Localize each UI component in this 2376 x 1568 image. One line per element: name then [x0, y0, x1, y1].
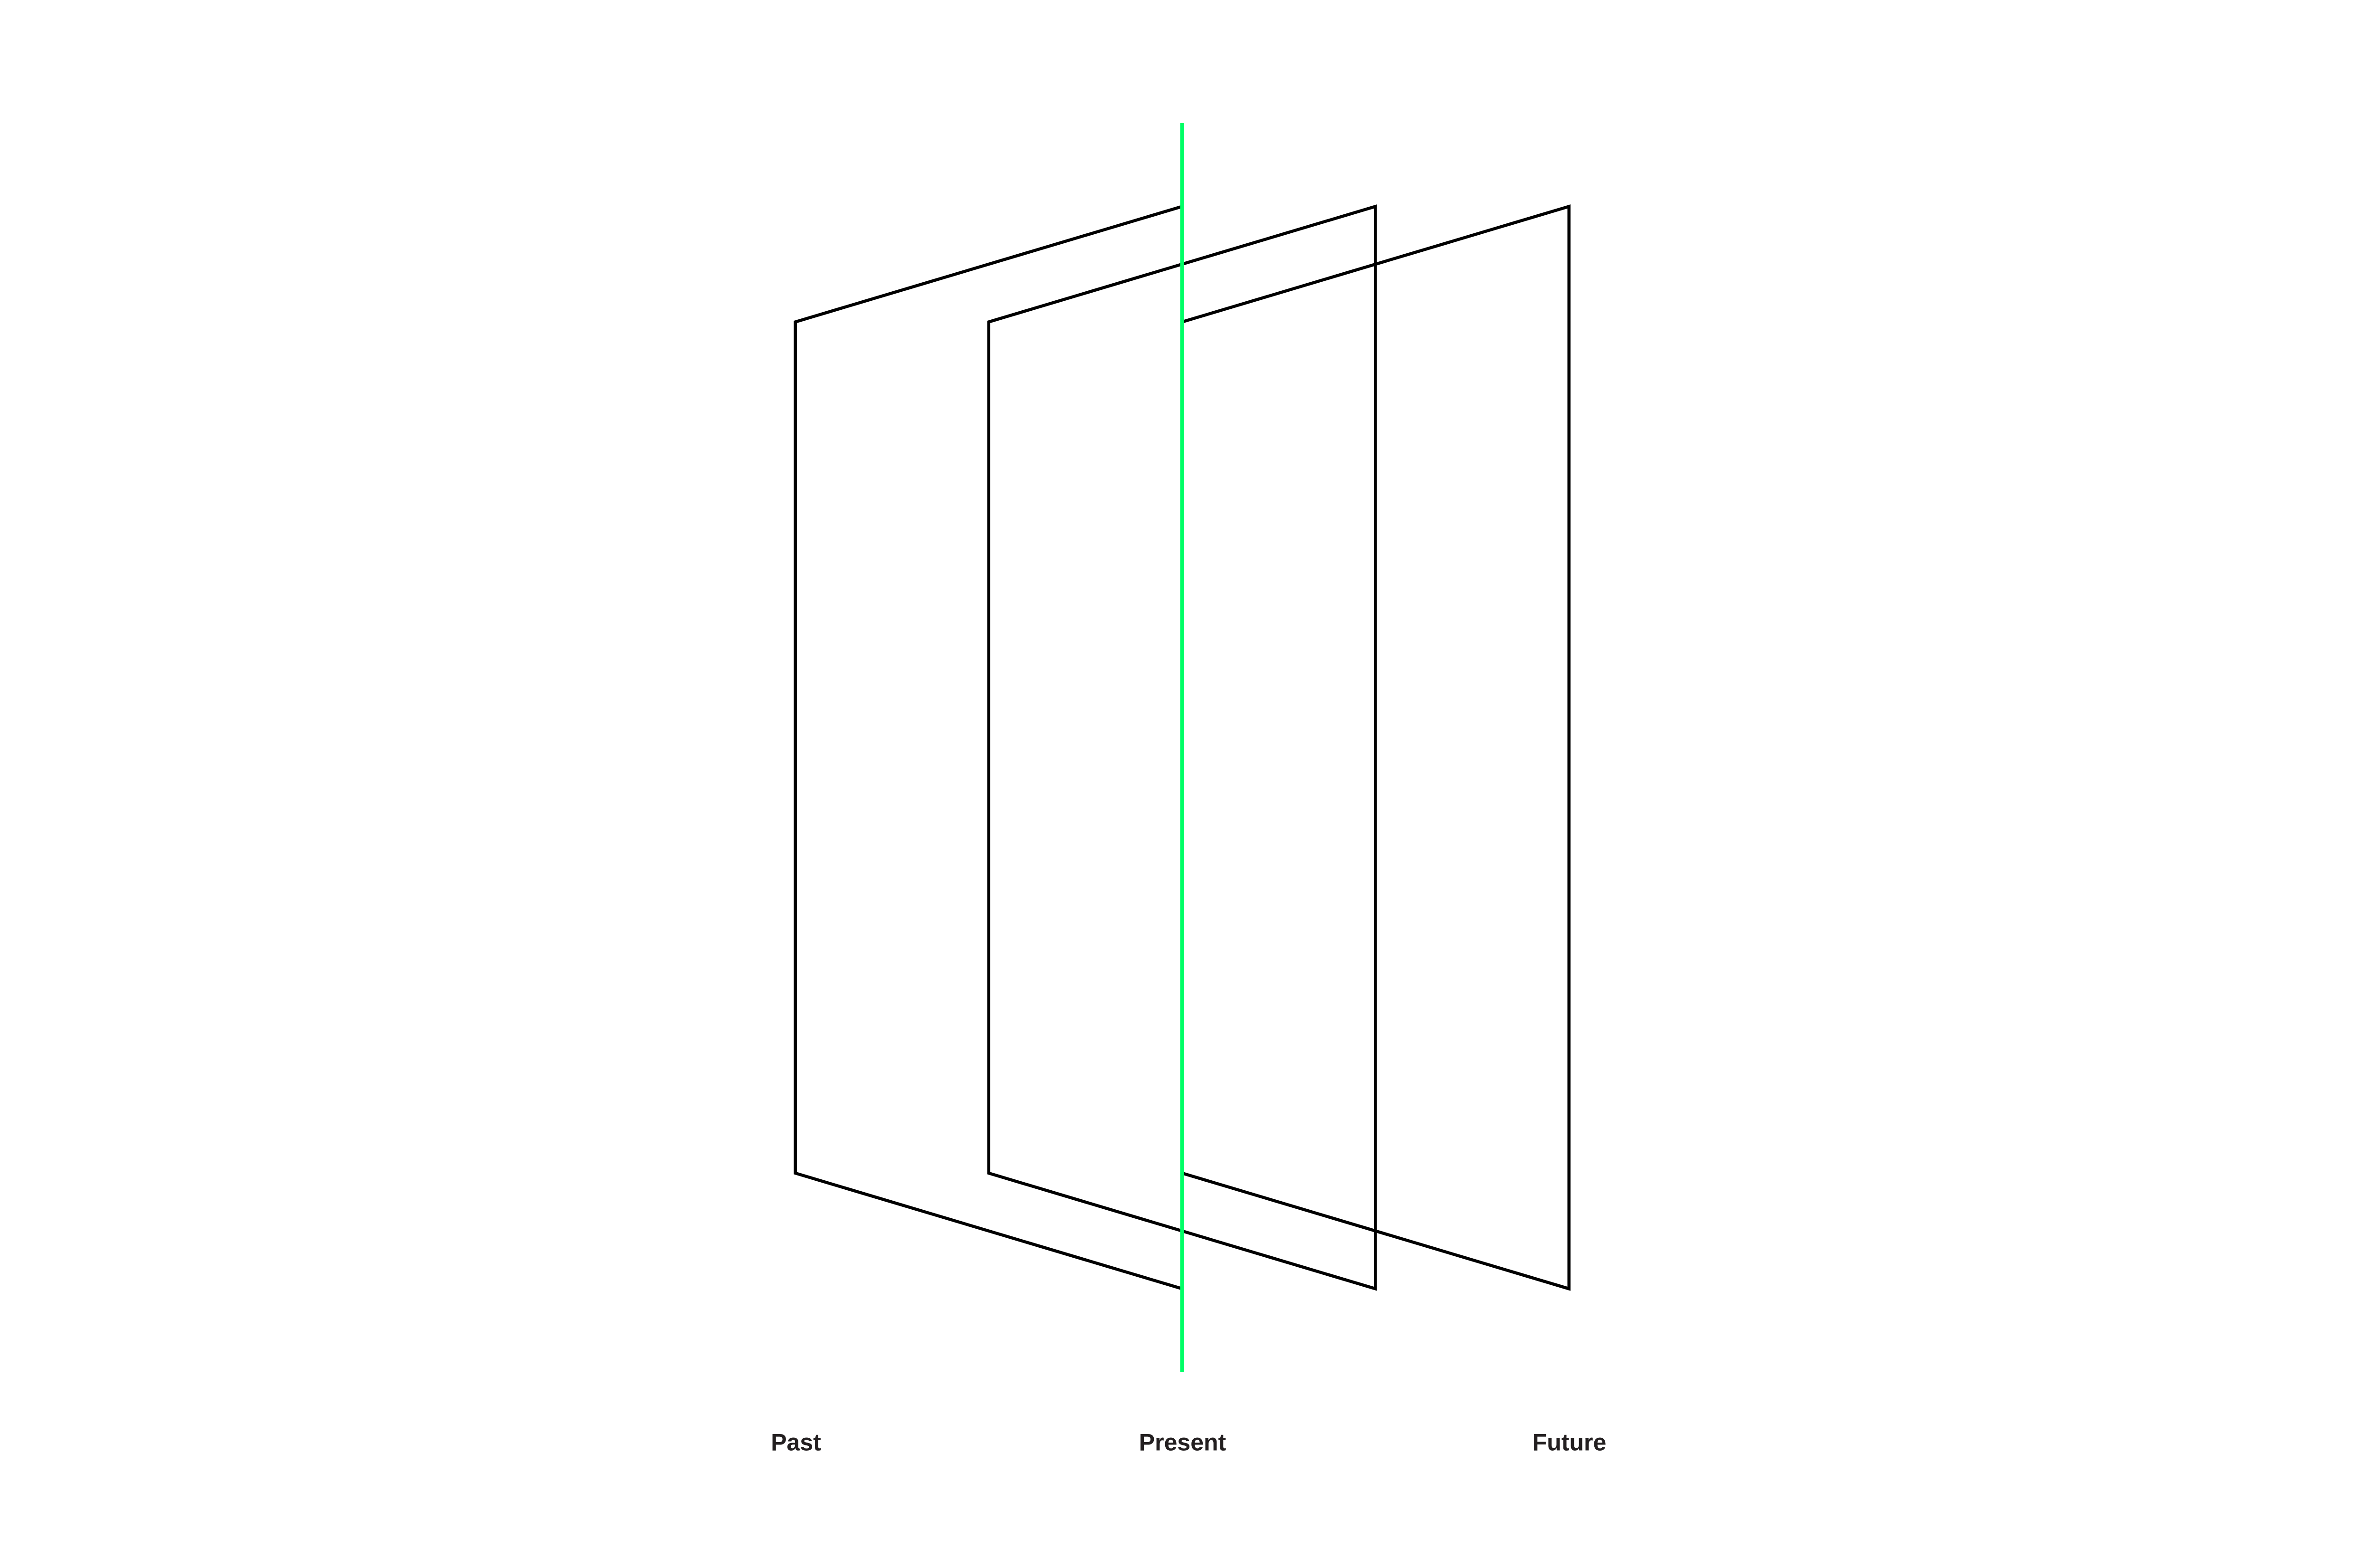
frame: past: [795, 206, 1182, 1289]
present line: [1180, 123, 1184, 1372]
label: present: Present: [1139, 1429, 1226, 1456]
frame: future: [1182, 206, 1569, 1289]
frame: present: [989, 206, 1375, 1289]
label: past: Past: [771, 1429, 821, 1456]
label: future: Future: [1533, 1429, 1606, 1456]
